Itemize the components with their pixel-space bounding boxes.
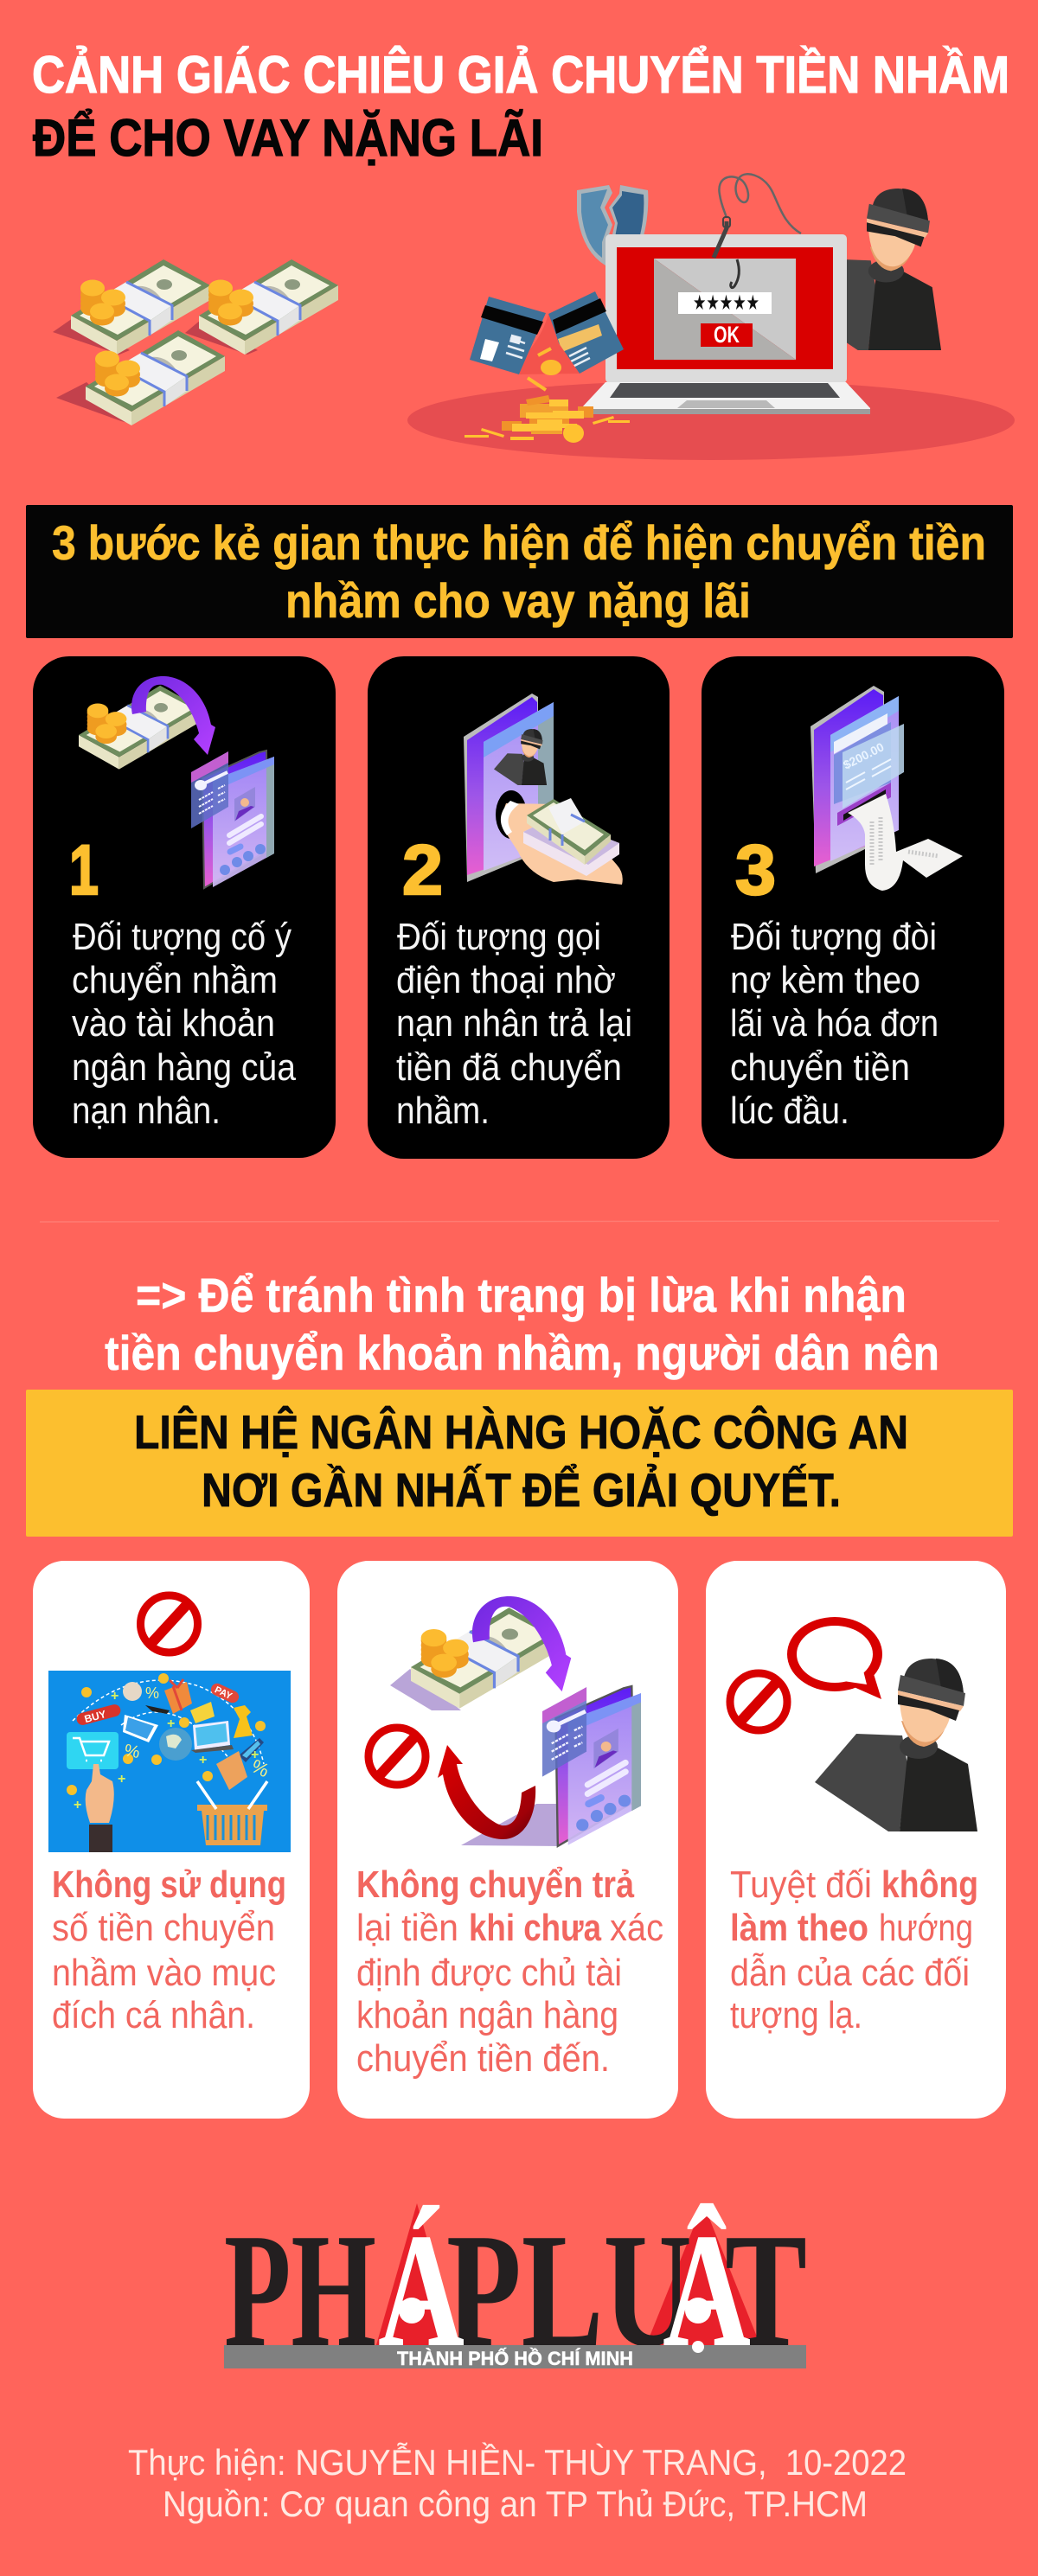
step 1 text: vào tài khoản xyxy=(72,1002,275,1045)
callout: contact bank or police: LIÊN HỆ NGÂN HÀNG HOẶC CÔNG AN xyxy=(134,1405,908,1459)
icon: pile of gold coins xyxy=(465,395,630,443)
text: do not follow strangers: dẫn của các đối xyxy=(730,1952,970,1994)
icon: torn bank card xyxy=(470,291,624,390)
step 1 text xyxy=(72,916,296,1132)
text: do not return money: Không chuyển trả xyxy=(356,1863,634,1906)
illustration: money stacks with coins xyxy=(53,259,338,425)
logo: Pháp Luật TP.HCM: THÀNH PHỐ HỒ CHÍ MINH xyxy=(397,2347,633,2369)
logo: Pháp Luật TP.HCM: PLU xyxy=(446,2200,692,2381)
step 2 text: nạn nhân trả lại xyxy=(396,1002,632,1045)
illustration: online shopping: % xyxy=(145,1684,159,1702)
illustration: money, phone and return arrow xyxy=(390,1596,641,1846)
step 3 text: chuyển tiền xyxy=(730,1046,910,1089)
text: do not spend: Không sử dụng xyxy=(52,1863,286,1906)
icon: speech bubble xyxy=(787,1617,882,1699)
text: do not spend: số tiền chuyển xyxy=(52,1907,275,1949)
heading: three steps xyxy=(26,505,1013,638)
credits: Thực hiện: NGUYỄN HIỀN- THÙY TRANG, 10-2022 xyxy=(128,2441,907,2483)
step 3 text xyxy=(730,916,939,1132)
text: do not spend xyxy=(52,1863,286,2036)
illustration: online shopping xyxy=(48,1671,291,1852)
step 2 text: điện thoại nhờ xyxy=(396,959,616,1001)
text: do not follow strangers: Tuyệt đối xyxy=(730,1863,872,1906)
icon: phone printing receipt xyxy=(811,686,963,891)
icon: fishing line xyxy=(719,174,801,233)
icon: prohibition sign xyxy=(140,1595,197,1652)
illustration: thief xyxy=(815,1659,977,1831)
title: ĐỂ CHO VAY NẶNG LÃI xyxy=(33,109,543,167)
step 3 text: nợ kèm theo xyxy=(730,959,920,1001)
credits: Nguồn: Cơ quan công an TP Thủ Đức, TP.HCM xyxy=(163,2483,868,2524)
logo: Pháp Luật TP.HCM xyxy=(224,2200,807,2381)
credits xyxy=(128,2441,907,2524)
illustration: masked thief xyxy=(789,189,941,350)
panel: do not spend xyxy=(33,1561,310,2119)
logo: Pháp Luật TP.HCM: Á xyxy=(378,2200,465,2381)
text: do not follow strangers: làm theo xyxy=(730,1907,868,1949)
text: do not return money: lại tiền xyxy=(356,1907,458,1949)
illustration: online shopping: + xyxy=(251,1748,259,1762)
advice intro text: => Để tránh tình trạng bị lừa khi nhận xyxy=(136,1268,907,1322)
step 1 text: ngân hàng của xyxy=(72,1046,296,1089)
callout: contact bank or police: NƠI GẦN NHẤT ĐỂ GIẢI QUYẾT. xyxy=(202,1463,841,1517)
logo: Pháp Luật TP.HCM: PH xyxy=(224,2200,376,2381)
text: do not return money: khoản ngân hàng xyxy=(356,1994,618,2036)
illustration: ground ellipse xyxy=(407,380,1015,460)
number 3: 3 xyxy=(735,831,776,910)
illustration: online shopping: + xyxy=(167,1716,175,1731)
heading: three steps: nhầm cho vay nặng lãi xyxy=(285,573,751,628)
text: do not follow strangers: hướng xyxy=(879,1907,973,1949)
step 3 text: lúc đầu. xyxy=(730,1090,849,1132)
icon: prohibition sign xyxy=(368,1728,426,1785)
logo: Pháp Luật TP.HCM: Â xyxy=(663,2200,751,2381)
icon: phone printing receipt: $200.00 xyxy=(841,739,887,772)
panel: do not follow strangers xyxy=(706,1561,1006,2119)
callout: contact bank or police xyxy=(26,1390,1013,1537)
illustration: online shopping: % xyxy=(248,1755,272,1781)
step 3 text: Đối tượng đòi xyxy=(731,916,937,958)
text: do not spend: đích cá nhân. xyxy=(52,1994,255,2036)
advice intro text xyxy=(105,1268,939,1380)
illustration: laptop with phishing login xyxy=(581,217,870,414)
icon: phone with thief hand and money xyxy=(464,694,623,885)
text: do not spend: nhầm vào mục xyxy=(52,1952,276,1994)
illustration: online shopping: % xyxy=(123,1741,142,1762)
step 2 text xyxy=(396,916,632,1132)
text: do not return money: khi chưa xyxy=(469,1907,601,1949)
illustration: laptop with phishing login: ★★★★★ xyxy=(693,291,759,315)
icon: money transferred to phone xyxy=(79,676,274,888)
number 1: 1 xyxy=(69,831,99,910)
panel: do not return money xyxy=(337,1561,678,2119)
text: do not follow strangers: tượng lạ. xyxy=(730,1994,862,2036)
illustration: online shopping: + xyxy=(118,1772,125,1787)
advice intro text: tiền chuyển khoản nhầm, người dân nên xyxy=(105,1326,939,1380)
text: do not return money: định được chủ tài xyxy=(356,1952,622,1994)
illustration: online shopping: + xyxy=(111,1689,119,1703)
text: do not follow strangers xyxy=(730,1863,978,2036)
icon: broken shield xyxy=(577,185,648,265)
step 2 text: Đối tượng gọi xyxy=(397,916,601,958)
text: do not return money xyxy=(356,1863,663,2080)
step 1 text: nạn nhân. xyxy=(72,1090,221,1132)
text: do not return money: chuyển tiền đến. xyxy=(356,2037,610,2080)
step 2 text: nhầm. xyxy=(396,1090,490,1132)
step 1 text: chuyển nhầm xyxy=(72,959,278,1001)
step 1 text: Đối tượng cố ý xyxy=(73,916,292,958)
logo: Pháp Luật TP.HCM: T xyxy=(725,2200,807,2381)
illustration: online shopping: + xyxy=(74,1798,81,1812)
text: do not return money: xác xyxy=(610,1907,663,1949)
number 2: 2 xyxy=(402,831,443,910)
illustration: online shopping: + xyxy=(199,1753,207,1767)
step 2 text: tiền đã chuyển xyxy=(396,1046,622,1089)
illustration: laptop with phishing login: OK xyxy=(714,322,740,348)
text: do not follow strangers: không xyxy=(881,1863,978,1906)
icon: prohibition sign xyxy=(730,1673,787,1730)
illustration: online shopping: BUY xyxy=(83,1708,107,1725)
panel: step 2 xyxy=(368,656,670,1159)
title xyxy=(32,46,1009,167)
panel: step 3 xyxy=(702,656,1004,1159)
panel: step 1 xyxy=(33,656,336,1158)
illustration: online shopping: PAY xyxy=(213,1684,234,1702)
step 3 text: lãi và hóa đơn xyxy=(730,1002,939,1045)
